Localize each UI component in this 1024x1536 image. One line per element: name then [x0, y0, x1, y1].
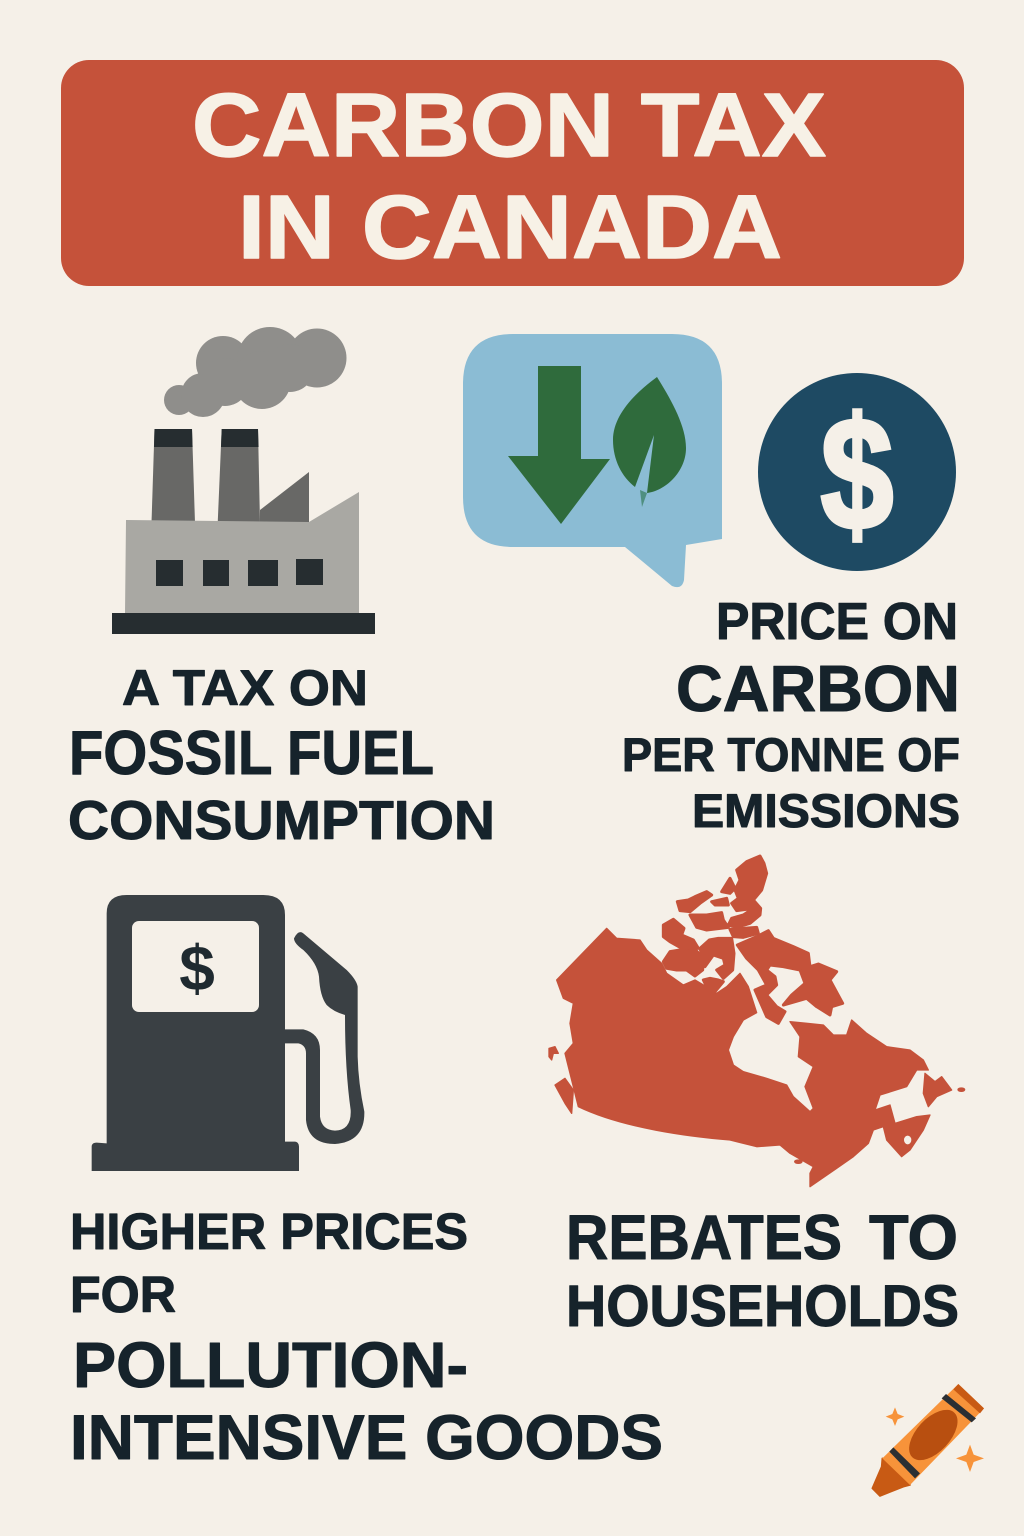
panel: rebates — [549, 856, 965, 1339]
text: higher prices for pollution-intensive goods: POLLUTION- — [73, 1329, 468, 1401]
text: higher prices for pollution-intensive goods: FOR — [70, 1266, 176, 1323]
icon: fuel pump: $ — [179, 932, 215, 1004]
icon: map of Canada — [549, 856, 965, 1187]
text: higher prices for pollution-intensive goods: INTENSIVE GOODS — [70, 1403, 663, 1473]
text: a tax on fossil fuel consumption: FOSSIL FUEL — [69, 719, 434, 788]
text: price on carbon per tonne of emissions: CARBON — [676, 652, 960, 725]
text: higher prices for pollution-intensive goods: HIGHER PRICES — [70, 1203, 468, 1260]
icon: fuel pump — [92, 895, 364, 1171]
title banner: CARBON TAX — [192, 76, 826, 176]
icon: speech bubble with down arrow and leaf — [463, 334, 722, 587]
text: rebates to households: TO — [869, 1203, 958, 1273]
title banner: IN CANADA — [238, 178, 782, 278]
title banner — [61, 60, 964, 286]
text: price on carbon per tonne of emissions: PER TONNE OF — [622, 728, 960, 781]
icon: crayon with sparkles — [872, 1384, 984, 1496]
text: price on carbon per tonne of emissions: EMISSIONS — [692, 784, 960, 837]
panel: fossil fuel tax — [68, 327, 495, 851]
text: price on carbon per tonne of emissions — [622, 593, 960, 837]
panel: higher prices — [70, 895, 663, 1473]
text: rebates to households — [566, 1203, 959, 1339]
icon: dollar coin: $ — [821, 386, 893, 564]
text: a tax on fossil fuel consumption: A TAX ON — [122, 660, 368, 716]
text: rebates to households: REBATES — [566, 1203, 842, 1273]
icon: factory with smoke — [112, 327, 375, 634]
icon: dollar coin — [758, 373, 956, 571]
text: a tax on fossil fuel consumption: CONSUMPTION — [68, 789, 495, 851]
text: rebates to households: HOUSEHOLDS — [566, 1274, 959, 1339]
panel: price on carbon — [463, 334, 960, 837]
text: a tax on fossil fuel consumption — [68, 660, 495, 851]
text: price on carbon per tonne of emissions: PRICE ON — [716, 593, 958, 651]
text: higher prices for pollution-intensive goods — [70, 1203, 663, 1473]
